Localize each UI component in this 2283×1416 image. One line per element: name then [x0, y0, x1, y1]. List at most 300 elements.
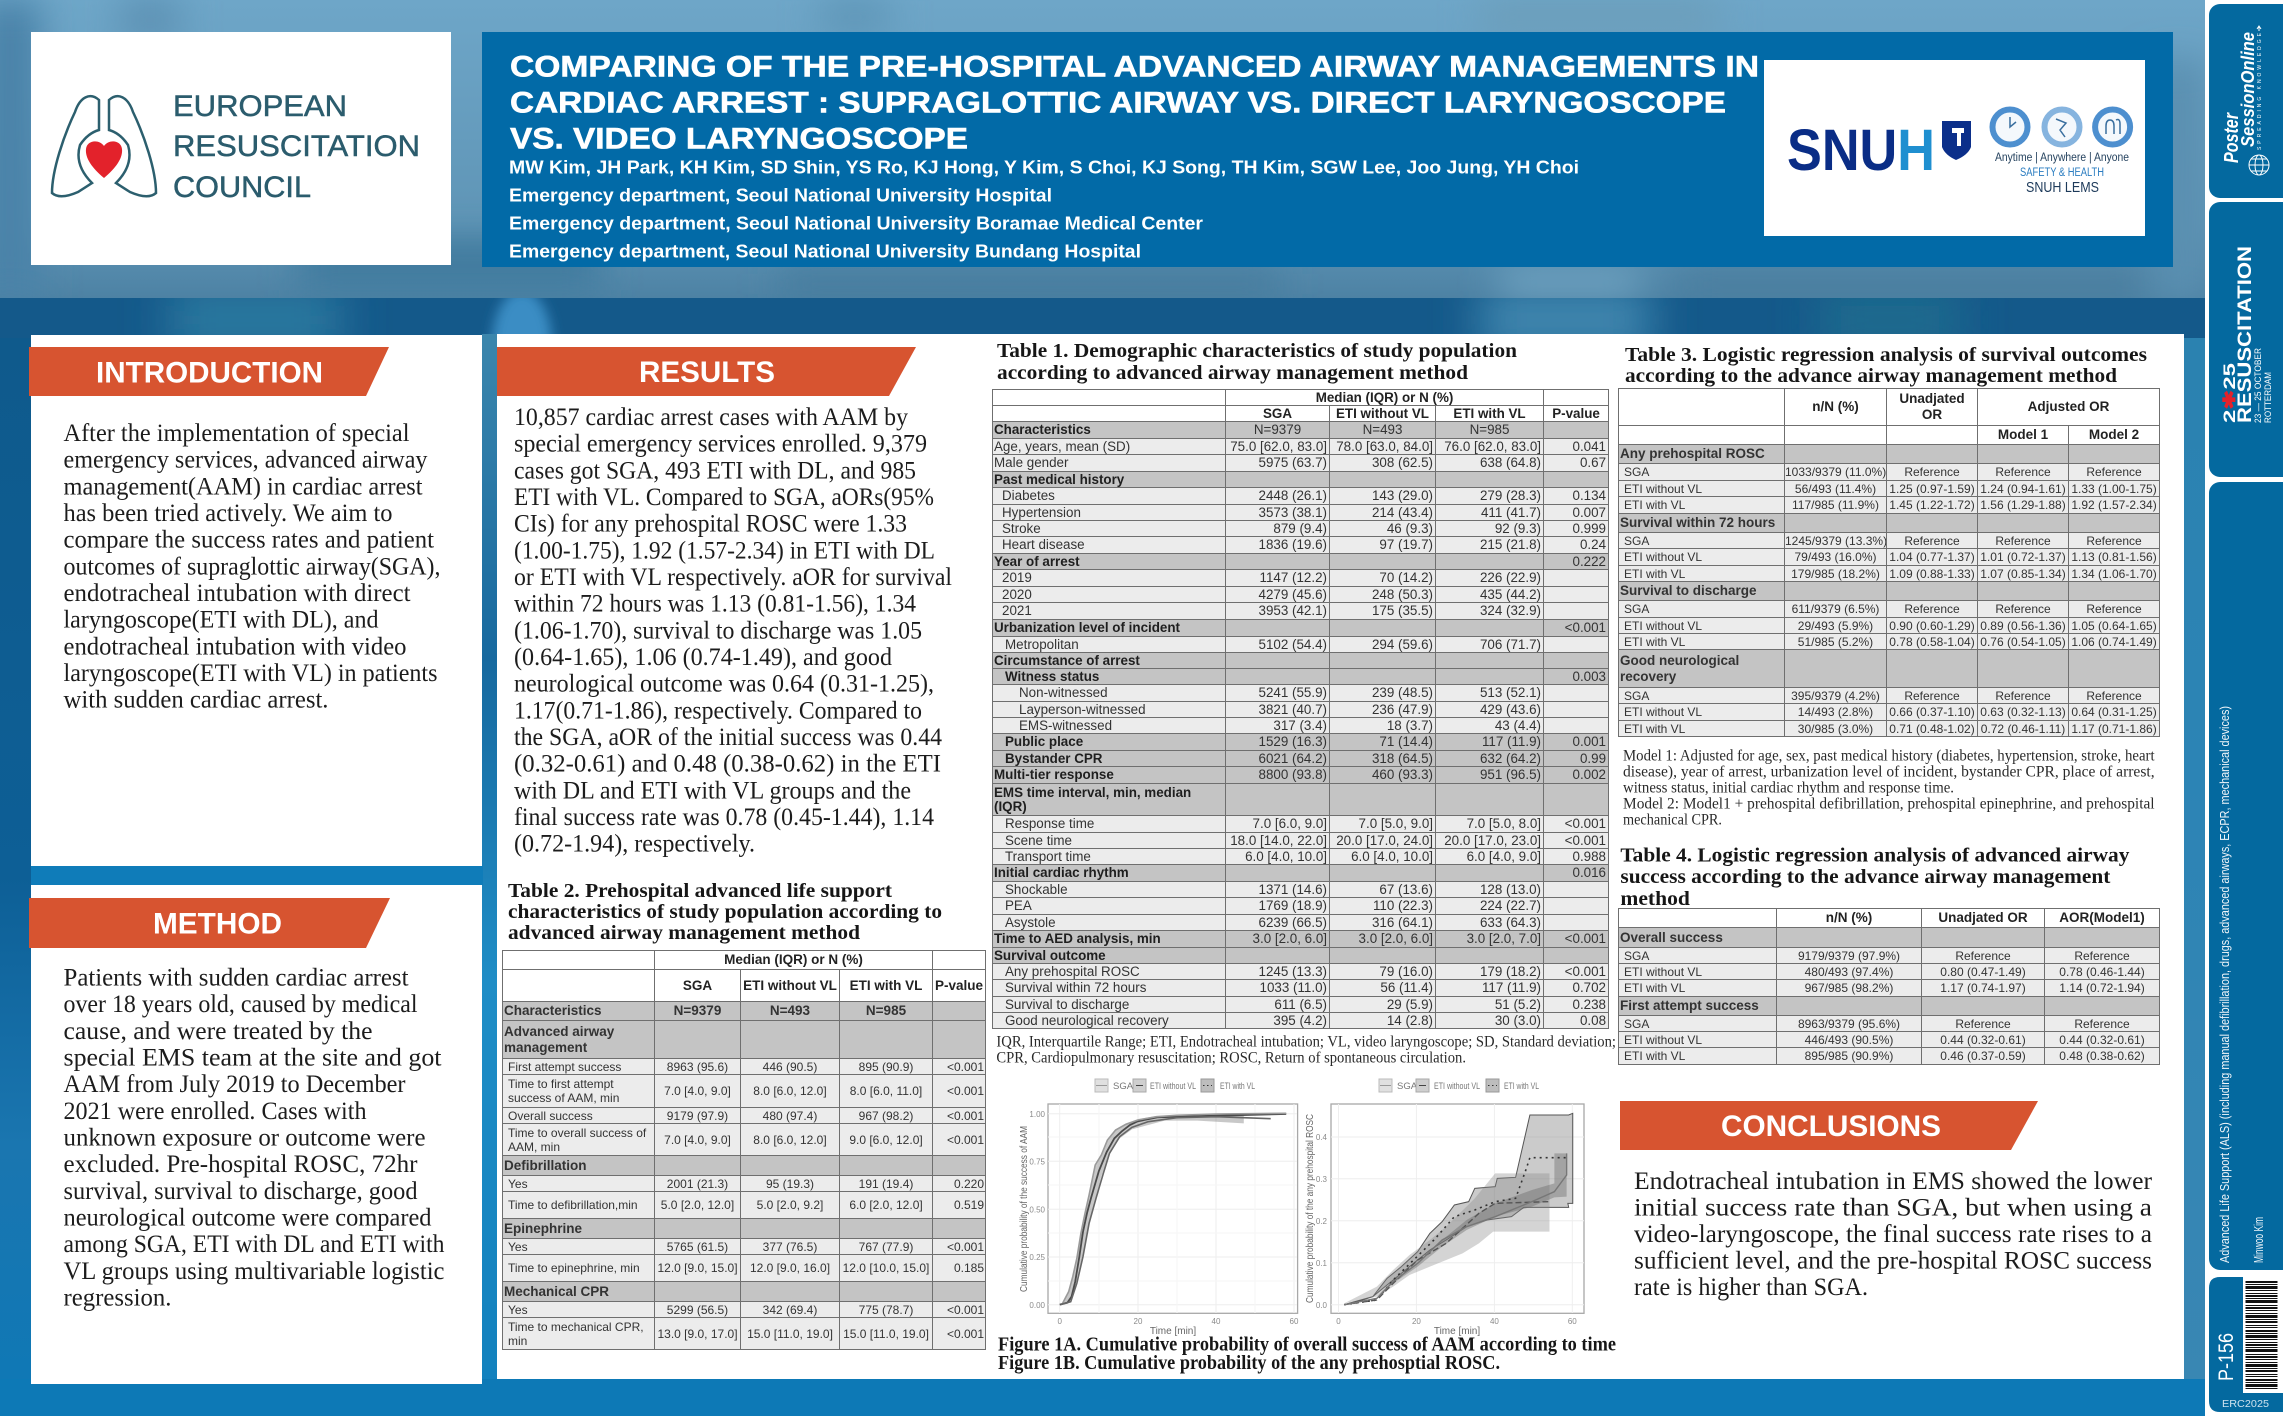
results text: the SGA, aOR of the initial success was 0.44: [514, 724, 942, 751]
table 3: logistic regression of survival outcomes: Reference: [1904, 688, 1960, 702]
method text: Patients with sudden cardiac arrest: [64, 964, 409, 992]
table 2: prehospital advanced life support characteristics: 8.0 [6.0, 12.0]: [753, 1132, 827, 1146]
table 1: demographic characteristics: <0.001: [1565, 832, 1606, 848]
table 1: demographic characteristics: 214 (43.4): [1372, 504, 1433, 520]
table 3: logistic regression of survival outcomes: 1.09 (0.88-1.33): [1889, 566, 1975, 580]
table 2: prehospital advanced life support characteristics: Mechanical CPR: [504, 1284, 609, 1298]
logo wordmark: RESUSCITATION: [173, 130, 420, 163]
sidebar tab: Resuscitation 2025: 23 — 25 OCTOBER: [2253, 348, 2263, 423]
table 1: demographic characteristics: 18 (3.7): [1387, 718, 1433, 732]
logo tagline: Anytime | Anywhere | Anyone: [1995, 152, 2129, 164]
figure 1A axes: 0.00: [1029, 1301, 1046, 1310]
table 1: demographic characteristics: 248 (50.3): [1372, 586, 1433, 602]
table 1: demographic characteristics: 46 (9.3): [1387, 520, 1433, 536]
figure 1B legend: [1379, 1079, 1539, 1092]
table 2: prehospital advanced life support characteristics: ETI without VL: [743, 978, 837, 992]
method text: [64, 964, 445, 1312]
table 3: logistic regression of survival outcomes: Model 2: [2089, 427, 2139, 442]
table 1: demographic characteristics: <0.001: [1565, 931, 1606, 946]
table 1: demographic characteristics: 0.134: [1572, 488, 1606, 503]
sidebar tab: poster number and barcode: P-156: [2215, 1333, 2238, 1381]
results text: within 72 hours was 1.13 (0.81-1.56), 1.34: [514, 591, 916, 618]
table 1: demographic characteristics: 67 (13.6): [1379, 882, 1433, 896]
table 2: prehospital advanced life support characteristics: <0.001: [947, 1302, 984, 1316]
authors and affiliations: Emergency department, Seoul National University Bundang Hospital: [509, 242, 1141, 262]
table 4 heading: [1620, 845, 2129, 910]
table 3: logistic regression of survival outcomes: recovery: [1620, 668, 1676, 684]
figure 1B axes: 0.4: [1316, 1133, 1328, 1142]
table 3: logistic regression of survival outcomes: 117/985 (11.9%): [1792, 498, 1879, 512]
table 1: demographic characteristics: 0.24: [1580, 537, 1606, 552]
table 2: prehospital advanced life support characteristics: 0.220: [954, 1176, 984, 1190]
sidebar tab: topic and presenter: Minwoo Kim: [2251, 1217, 2266, 1263]
figure 1A curves: [1060, 1113, 1286, 1305]
table 1: demographic characteristics: 70 (14.2): [1379, 570, 1433, 585]
method text: VL groups using multivariable logistic: [64, 1258, 444, 1285]
table 4: logistic regression of advanced airway success: SGA: [1624, 1016, 1649, 1030]
table 1: demographic characteristics: Male gender: [994, 455, 1068, 470]
introduction text: After the implementation of special: [64, 420, 410, 447]
table 1: demographic characteristics: 6239 (66.5): [1258, 914, 1327, 930]
figure 1A axes: [1019, 1110, 1299, 1337]
table 1: demographic characteristics: 4279 (45.6): [1258, 586, 1327, 602]
table 1: demographic characteristics: 324 (32.9): [1480, 603, 1541, 618]
introduction text: laryngoscope(ETI with DL), and: [64, 607, 379, 634]
table 1: demographic characteristics: EMS-witnessed: [1019, 718, 1112, 732]
table 3 model notes: witness status, initial cardiac rhythm and response time.: [1623, 780, 1954, 797]
results text: 1.17(0.71-1.86), respectively. Compared to: [514, 697, 922, 724]
table 2: prehospital advanced life support characteristics: AAM, min: [508, 1140, 560, 1154]
table 1: demographic characteristics: 56 (11.4): [1380, 980, 1433, 995]
table 1: demographic characteristics: (IQR): [994, 798, 1027, 814]
table 1: demographic characteristics: 0.002: [1572, 767, 1606, 782]
table 2: prehospital advanced life support characteristics: P-value: [935, 978, 983, 992]
table 1: demographic characteristics: 294 (59.6): [1372, 636, 1433, 652]
sidebar tab: poster number and barcode: ERC2025: [2222, 1398, 2269, 1410]
figure 1B axes: Cumulative probability of the any prehospital ROSC: [1305, 1114, 1316, 1303]
table 3 heading: according to the advance airway management method: [1625, 365, 2117, 387]
table 1: demographic characteristics: 7.0 [6.0, 9.0]: [1253, 816, 1327, 831]
table 1: demographic characteristics: 179 (18.2): [1480, 964, 1541, 978]
table 3: logistic regression of survival outcomes: 29/493 (5.9%): [1798, 618, 1873, 632]
table 2: prehospital advanced life support characteristics: Yes: [508, 1302, 528, 1316]
logo panel: European Resuscitation Council: [31, 32, 451, 265]
table 3 heading: Table 3. Logistic regression analysis of survival outcomes: [1625, 344, 2147, 366]
introduction text: emergency services, advanced airway: [64, 447, 428, 474]
table 1: demographic characteristics: 78.0 [63.0, 84.0]: [1336, 438, 1433, 454]
table 1 footnote: IQR, Interquartile Range; ETI, Endotracheal intubation; VL, video laryngoscope; SD, Standard deviation;: [996, 1034, 1616, 1051]
table 2: prehospital advanced life support characteristics: Yes: [508, 1240, 528, 1254]
table 3 heading: [1625, 344, 2147, 387]
table 1: demographic characteristics: Diabetes: [1002, 488, 1055, 503]
table 3: logistic regression of survival outcomes: Reference: [2086, 688, 2142, 702]
table 3: logistic regression of survival outcomes: 179/985 (18.2%): [1791, 566, 1880, 580]
title: COMPARING OF THE PRE-HOSPITAL ADVANCED AIRWAY MANAGEMENTS IN: [510, 51, 1759, 84]
table 2: prehospital advanced life support characteristics: 9.0 [6.0, 12.0]: [849, 1132, 923, 1146]
table 2: prehospital advanced life support characteristics: <0.001: [947, 1060, 984, 1074]
sidebar tab: Poster Session Online: SessionOnline: [2238, 32, 2258, 147]
table 1: demographic characteristics: Response time: [1005, 816, 1094, 831]
table 4: logistic regression of advanced airway success: 0.44 (0.32-0.61): [1940, 1032, 2026, 1046]
figure 1A legend: [1095, 1079, 1255, 1092]
table 2: prehospital advanced life support characteristics: 8.0 [6.0, 11.0]: [850, 1084, 922, 1098]
table 2: prehospital advanced life support characteristics: 895 (90.9): [859, 1060, 913, 1074]
table 3: logistic regression of survival outcomes: 51/985 (5.2%): [1798, 634, 1873, 648]
table 1: demographic characteristics: 3953 (42.1): [1258, 603, 1327, 618]
table 3: logistic regression of survival outcomes: 1.06 (0.74-1.49): [2071, 634, 2157, 648]
table 1: demographic characteristics: 279 (28.3): [1480, 488, 1541, 503]
table 2: prehospital advanced life support characteristics: 5765 (61.5): [667, 1240, 728, 1254]
sidebar tab: Resuscitation 2025: [2209, 202, 2283, 477]
table 1: demographic characteristics: 611 (6.5): [1274, 996, 1327, 1012]
table 1: demographic characteristics: Hypertension: [1002, 504, 1081, 520]
logo tagline: SNUH LEMS: [2026, 180, 2099, 196]
table 2: prehospital advanced life support characteristics: 15.0 [11.0, 19.0]: [843, 1326, 929, 1340]
table 1: demographic characteristics: 0.016: [1572, 865, 1606, 880]
table 2: prehospital advanced life support characteristics: min: [508, 1334, 527, 1348]
table 1: demographic characteristics: 1836 (19.6): [1258, 537, 1327, 552]
figure 1B axes: 0.2: [1316, 1217, 1328, 1226]
table 3: logistic regression of survival outcomes: SGA: [1624, 602, 1649, 616]
method text: regression.: [64, 1284, 172, 1312]
table 3: logistic regression of survival outcomes: ETI with VL: [1624, 634, 1685, 648]
table 3: logistic regression of survival outcomes: Reference: [1995, 534, 2051, 548]
table 1: demographic characteristics: 1529 (16.3): [1258, 734, 1327, 749]
table 3: logistic regression of survival outcomes: ETI with VL: [1624, 566, 1685, 580]
table 2: prehospital advanced life support characteristics: N=9379: [674, 1003, 721, 1018]
table 1: demographic characteristics: 0.702: [1572, 980, 1606, 995]
logo panel: SNUH: [1764, 60, 2145, 236]
table 1: demographic characteristics: 5241 (55.9): [1258, 685, 1327, 700]
table 1: demographic characteristics: Transport time: [1005, 848, 1091, 864]
table 1: demographic characteristics: 318 (64.5): [1372, 750, 1433, 766]
table 3: logistic regression of survival outcomes: 0.64 (0.31-1.25): [2071, 705, 2157, 719]
figure 1A axes: 0.25: [1029, 1253, 1046, 1262]
table 1: demographic characteristics: 0.001: [1572, 734, 1606, 749]
table 3: logistic regression of survival outcomes: Reference: [1995, 465, 2051, 479]
table 4: logistic regression of advanced airway success: 8963/9379 (95.6%): [1798, 1016, 1900, 1030]
table 4: logistic regression of advanced airway success: 895/985 (90.9%): [1805, 1049, 1893, 1063]
results text: or ETI with VL respectively. aOR for survival: [514, 564, 952, 591]
table 3: logistic regression of survival outcomes: 1.92 (1.57-2.34): [2071, 498, 2157, 512]
authors and affiliations: MW Kim, JH Park, KH Kim, SD Shin, YS Ro, KJ Hong, Y Kim, S Choi, KJ Song, TH Kim, SGW Lee, Joo Jung, YH Choi: [509, 157, 1579, 177]
table 1: demographic characteristics: 239 (48.5): [1372, 685, 1433, 700]
table 3: logistic regression of survival outcomes: 1.34 (1.06-1.70): [2071, 566, 2157, 580]
table 1: demographic characteristics: 638 (64.8): [1480, 455, 1541, 470]
table 2: prehospital advanced life support characteristics: SGA: [683, 978, 712, 992]
table 3: logistic regression of survival outcomes: Reference: [1995, 688, 2051, 702]
table 2: prehospital advanced life support characteristics: <0.001: [947, 1326, 984, 1340]
table 3: logistic regression of survival outcomes: 0.78 (0.58-1.04): [1889, 634, 1975, 648]
table 1: demographic characteristics: 43 (4.4): [1495, 718, 1541, 732]
table 1: demographic characteristics: 0.238: [1572, 996, 1606, 1012]
table 1: demographic characteristics: Metropolitan: [1005, 636, 1079, 652]
table 3: logistic regression of survival outcomes: 1.45 (1.22-1.72): [1889, 498, 1975, 512]
table 1: demographic characteristics: 75.0 [62.0, 83.0]: [1230, 438, 1327, 454]
table 1: demographic characteristics: Shockable: [1005, 882, 1068, 896]
table 2: prehospital advanced life support characteristics: success of AAM, min: [508, 1091, 619, 1105]
table 2: prehospital advanced life support characteristics: 12.0 [10.0, 15.0]: [843, 1261, 929, 1275]
logo wordmark: COUNCIL: [173, 171, 311, 204]
figure 1A plot frame and grid: [1048, 1104, 1298, 1313]
table 3: logistic regression of survival outcomes: 1033/9379 (11.0%): [1785, 465, 1886, 479]
table 1: demographic characteristics: 97 (19.7): [1379, 537, 1433, 552]
table 4: logistic regression of advanced airway success: 0.48 (0.38-0.62): [2059, 1049, 2145, 1063]
results text: [514, 404, 952, 858]
table 3: logistic regression of survival outcomes: 0.71 (0.48-1.02): [1889, 722, 1975, 736]
table 4: logistic regression of advanced airway success: 0.80 (0.47-1.49): [1940, 964, 2026, 978]
icon: three service circles: [1992, 110, 2130, 144]
table 1: demographic characteristics: 951 (96.5): [1480, 767, 1541, 782]
sidebar: [2205, 0, 2283, 1416]
title panel: [482, 32, 2173, 267]
table 1 heading: according to advanced airway management method: [997, 362, 1468, 384]
table 2 heading: [508, 880, 942, 944]
method ribbon: [29, 898, 390, 948]
table 2: prehospital advanced life support characteristics: 767 (77.9): [859, 1240, 913, 1254]
figure 1A axes: Time [min]: [1150, 1326, 1196, 1337]
table 1: demographic characteristics: Age, years, mean (SD): [994, 438, 1130, 454]
table 3: logistic regression of survival outcomes: 1.01 (0.72-1.37): [1980, 550, 2066, 564]
conclusions text: rate is higher than SGA.: [1634, 1274, 1868, 1301]
figure 1A legend: SGA: [1113, 1081, 1134, 1092]
table 1: demographic characteristics: 30 (3.0): [1495, 1012, 1541, 1028]
table 3: logistic regression of survival outcomes: 1.25 (0.97-1.59): [1889, 482, 1975, 496]
results ribbon: RESULTS: [639, 356, 775, 389]
table 4 heading: Table 4. Logistic regression analysis of advanced airway: [1620, 845, 2129, 867]
table 1: demographic characteristics: Median (IQR) or N (%): [1316, 390, 1453, 404]
table 1: demographic characteristics: SGA: [1263, 406, 1292, 420]
introduction text: with sudden cardiac arrest.: [64, 687, 328, 714]
figure 1A axes: 0.50: [1029, 1206, 1046, 1214]
table 2: prehospital advanced life support characteristics: Time to epinephrine, min: [508, 1261, 640, 1275]
table 1: demographic characteristics: Good neurological recovery: [1005, 1012, 1169, 1028]
table 1: demographic characteristics: 7.0 [5.0, 8.0]: [1467, 816, 1541, 831]
table 4 heading: method: [1620, 888, 1690, 910]
table 3: logistic regression of survival outcomes: ETI without VL: [1624, 482, 1702, 496]
figure 1B legend: ETI without VL: [1434, 1081, 1480, 1092]
table 2: prehospital advanced life support characteristics: 13.0 [9.0, 17.0]: [657, 1326, 738, 1340]
table 3: logistic regression of survival outcomes: 1.17 (0.71-1.86): [2071, 722, 2157, 736]
table 3: logistic regression of survival outcomes: 0.76 (0.54-1.05): [1980, 634, 2066, 648]
table 1: demographic characteristics: 110 (22.3): [1373, 898, 1433, 913]
authors and affiliations: [509, 157, 1579, 262]
conclusions text: sufficient level, and the pre-hospital ROSC success: [1634, 1248, 2152, 1274]
table 3: logistic regression of survival outcomes: Reference: [2086, 465, 2142, 479]
table 1: demographic characteristics: 79 (16.0): [1379, 964, 1433, 978]
figure 1A axes: 40: [1212, 1317, 1221, 1326]
table 3: logistic regression of survival outcomes: 0.63 (0.32-1.13): [1980, 705, 2066, 719]
results text: special emergency services enrolled. 9,379: [514, 431, 927, 458]
table 2: prehospital advanced life support characteristics: 9179 (97.9): [667, 1108, 728, 1122]
table 3: logistic regression of survival outcomes: 30/985 (3.0%): [1798, 722, 1873, 736]
table 3: logistic regression of survival outcomes: 1.07 (0.85-1.34): [1980, 566, 2066, 580]
sidebar tab: topic and presenter: Advanced Life Support (ALS) (including manual defibrillation, drugs, advanced airways, ECPR, mechanical devices): [2217, 706, 2232, 1263]
table 2: prehospital advanced life support characteristics: 5299 (56.5): [667, 1302, 728, 1316]
table 1: demographic characteristics: Asystole: [1005, 914, 1056, 930]
results ribbon: [497, 347, 916, 396]
introduction text: compare the success rates and patient: [64, 527, 434, 554]
figure 1B legend: ETI with VL: [1504, 1081, 1539, 1092]
sidebar tab: poster number and barcode: [2209, 1277, 2283, 1412]
table 4: logistic regression of advanced airway success: Reference: [2074, 1016, 2130, 1030]
panel: introduction: [29, 335, 482, 866]
table 1: demographic characteristics: 6.0 [4.0, 10.0]: [1245, 848, 1327, 864]
table 2: prehospital advanced life support characteristics: First attempt success: [508, 1060, 621, 1074]
table 1: demographic characteristics: Bystander CPR: [1005, 750, 1102, 766]
table 1: demographic characteristics: Initial cardiac rhythm: [994, 865, 1129, 880]
table 4: logistic regression of advanced airway success: Reference: [1955, 1016, 2011, 1030]
table 4: logistic regression of advanced airway success: SGA: [1624, 948, 1649, 962]
table 1: demographic characteristics: 513 (52.1): [1480, 685, 1541, 700]
table 2: prehospital advanced life support characteristics: <0.001: [947, 1108, 984, 1122]
table 1: demographic characteristics: 1245 (13.3): [1258, 964, 1327, 978]
table 2: prehospital advanced life support characteristics: 95 (19.3): [766, 1176, 814, 1190]
table 2: prehospital advanced life support characteristics: Yes: [508, 1176, 528, 1190]
table 2: prehospital advanced life support characteristics: 7.0 [4.0, 9.0]: [664, 1132, 731, 1146]
table 1: demographic characteristics: Year of arrest: [994, 554, 1080, 568]
table 1: demographic characteristics: Stroke: [1002, 520, 1041, 536]
figure 1B plot frame and grid: [1331, 1104, 1584, 1313]
table 1: demographic characteristics: 117 (11.9): [1482, 734, 1541, 749]
table 3: logistic regression of survival outcomes: Reference: [1904, 534, 1960, 548]
figure 1B axes: 60: [1568, 1317, 1577, 1326]
table 2: prehospital advanced life support characteristics: <0.001: [947, 1084, 984, 1098]
icon: shield: [1942, 121, 1971, 160]
table 2 heading: advanced airway management method: [508, 922, 860, 944]
table 1: demographic characteristics: 215 (21.8): [1480, 537, 1541, 552]
logo wordmark: [173, 90, 420, 204]
figure 1B axes: Time [min]: [1434, 1326, 1480, 1337]
table 1: demographic characteristics: 1769 (18.9): [1258, 898, 1327, 913]
table 3: logistic regression of survival outcomes: 1.33 (1.00-1.75): [2071, 482, 2157, 496]
table 1: demographic characteristics: 308 (62.5): [1372, 455, 1433, 470]
table 1: demographic characteristics: 3.0 [2.0, 6.0]: [1359, 931, 1433, 946]
table 1: demographic characteristics: 3.0 [2.0, 6.0]: [1253, 931, 1327, 946]
table 2: prehospital advanced life support characteristics: 0.519: [954, 1198, 984, 1212]
table 3: logistic regression of survival outcomes: n/N (%): [1812, 399, 1859, 414]
table 3: logistic regression of survival outcomes: OR: [1922, 407, 1942, 422]
table 3: logistic regression of survival outcomes: Reference: [1995, 602, 2051, 616]
figure caption: Figure 1B. Cumulative probability of the any prehosptial ROSC.: [998, 1352, 1500, 1374]
figure 1B axes: [1305, 1114, 1577, 1337]
table 4: logistic regression of advanced airway success: 1.14 (0.72-1.94): [2059, 981, 2145, 995]
sidebar tab: Resuscitation 2025: ROTTERDAM: [2263, 372, 2273, 423]
table 3: logistic regression of survival outcomes: 0.72 (0.46-1.11): [1981, 722, 2065, 736]
table 1: demographic characteristics: 5975 (63.7): [1258, 455, 1327, 470]
table 1 footnote: CPR, Cardiopulmonary resuscitation; ROSC, Return of spontaneous circulation.: [996, 1050, 1466, 1067]
table 2: prehospital advanced life support characteristics: 377 (76.5): [763, 1240, 817, 1254]
table 3: logistic regression of survival outcomes: 0.66 (0.37-1.10): [1889, 705, 1975, 719]
table 1: demographic characteristics: Survival to discharge: [1005, 996, 1129, 1012]
table 1: demographic characteristics: 429 (43.6): [1480, 702, 1541, 716]
method text: AAM from July 2019 to December: [64, 1071, 406, 1098]
table 1: demographic characteristics: 0.003: [1572, 668, 1606, 684]
table 3: logistic regression of survival outcomes: ETI without VL: [1624, 618, 1702, 632]
results text: (0.72-1.94), respectively.: [514, 831, 755, 858]
table 1: demographic characteristics: Time to AED analysis, min: [994, 931, 1161, 946]
results text: neurological outcome was 0.64 (0.31-1.25),: [514, 671, 934, 698]
conclusions text: video-laryngoscope, the final success rate rises to a: [1634, 1221, 2152, 1248]
table 3: logistic regression of survival outcomes: ETI without VL: [1624, 705, 1702, 719]
table 3: logistic regression of survival outcomes: 1.04 (0.77-1.37): [1889, 550, 1975, 564]
table 1: demographic characteristics: 236 (47.9): [1372, 702, 1433, 716]
table 1: demographic characteristics: 0.08: [1580, 1012, 1606, 1028]
introduction text: has been tried actively. We aim to: [64, 500, 392, 527]
table 1: demographic characteristics: 0.007: [1572, 504, 1606, 520]
table 2: prehospital advanced life support characteristics: 5.0 [2.0, 12.0]: [661, 1198, 734, 1212]
table 4 heading: success according to the advance airway management: [1620, 866, 2111, 888]
table 3: logistic regression of survival outcomes: Reference: [1904, 602, 1960, 616]
method text: special EMS team at the site and got: [64, 1044, 442, 1072]
table 3: logistic regression of survival outcomes: Survival within 72 hours: [1620, 515, 1775, 530]
introduction text: endotracheal intubation with direct: [64, 580, 411, 607]
table 1: demographic characteristics: 175 (35.5): [1372, 603, 1433, 618]
table 1: demographic characteristics: 0.99: [1580, 750, 1606, 766]
table 2: prehospital advanced life support characteristics: N=985: [866, 1003, 906, 1018]
table 2: prehospital advanced life support characteristics: [502, 950, 986, 1350]
introduction ribbon: INTRODUCTION: [96, 356, 323, 390]
table 2: prehospital advanced life support characteristics: Time to overall success of: [508, 1126, 646, 1140]
method text: over 18 years old, caused by medical: [64, 991, 418, 1018]
table 1: demographic characteristics: Survival outcome: [994, 948, 1106, 962]
logo tagline: SAFETY & HEALTH: [2020, 167, 2104, 179]
table 3: logistic regression of survival outcomes: 14/493 (2.8%): [1798, 705, 1873, 719]
table 4: logistic regression of advanced airway success: ETI without VL: [1624, 1032, 1702, 1046]
table 4: logistic regression of advanced airway success: ETI with VL: [1624, 981, 1685, 995]
table 1: demographic characteristics: 6.0 [4.0, 10.0]: [1351, 848, 1433, 864]
figure 1B axes: 40: [1490, 1317, 1499, 1326]
table 2: prehospital advanced life support characteristics: 15.0 [11.0, 19.0]: [747, 1326, 833, 1340]
table 2: prehospital advanced life support characteristics: 2001 (21.3): [667, 1176, 728, 1190]
table 3: logistic regression of survival outcomes: ETI with VL: [1624, 722, 1685, 736]
table 1: demographic characteristics: 143 (29.0): [1372, 488, 1433, 503]
table 3: logistic regression of survival outcomes: 56/493 (11.4%): [1795, 482, 1876, 496]
sidebar tab: Poster Session Online: [2209, 4, 2283, 198]
figure 1A: cumulative probability of overall success: [1019, 1079, 1299, 1337]
table 3: logistic regression of survival outcomes: Reference: [1904, 465, 1960, 479]
table 4: logistic regression of advanced airway success: First attempt success: [1620, 998, 1759, 1013]
results text: (1.06-1.70), survival to discharge was 1.05: [514, 617, 922, 644]
method ribbon: METHOD: [153, 908, 282, 940]
logo wordmark: EUROPEAN: [173, 90, 347, 123]
table 3 model notes: mechanical CPR.: [1623, 811, 1722, 828]
table 1: demographic characteristics: 76.0 [62.0, 83.0]: [1444, 438, 1541, 454]
table 1: demographic characteristics: 435 (44.2): [1480, 586, 1541, 602]
table 1: demographic characteristics: 317 (3.4): [1273, 718, 1327, 732]
table 1: demographic characteristics: 224 (22.7): [1480, 898, 1541, 913]
table 2: prehospital advanced life support characteristics: 342 (69.4): [763, 1302, 817, 1316]
figure 1B axes: 0: [1336, 1317, 1341, 1326]
table 1: demographic characteristics: Survival within 72 hours: [1005, 980, 1146, 995]
barcode: [2246, 1281, 2278, 1390]
figure 1A legend: ETI without VL: [1150, 1081, 1196, 1092]
method text: 2021 were enrolled. Cases with: [64, 1098, 367, 1125]
authors and affiliations: Emergency department, Seoul National University Boramae Medical Center: [509, 214, 1203, 234]
sidebar tab: Poster Session Online: Poster: [2221, 112, 2243, 163]
results text: final success rate was 0.78 (0.45-1.44), 1.14: [514, 804, 934, 831]
table 2: prehospital advanced life support characteristics: Epinephrine: [504, 1220, 582, 1236]
table 2: prehospital advanced life support characteristics: N=493: [770, 1003, 810, 1018]
results text: (0.32-0.61) and 0.48 (0.38-0.62) in the ETI: [514, 751, 941, 778]
figure 1B axes: 0.3: [1316, 1175, 1328, 1184]
table 1: demographic characteristics: 3821 (40.7): [1258, 702, 1327, 716]
table 1: demographic characteristics: Urbanization level of incident: [994, 620, 1180, 635]
table 1: demographic characteristics: 3573 (38.1): [1258, 504, 1327, 520]
introduction text: outcomes of supraglottic airway(SGA),: [64, 553, 440, 580]
table 1: demographic characteristics: 411 (41.7): [1481, 504, 1541, 520]
table 3: logistic regression of survival outcomes: Survival to discharge: [1620, 583, 1757, 598]
